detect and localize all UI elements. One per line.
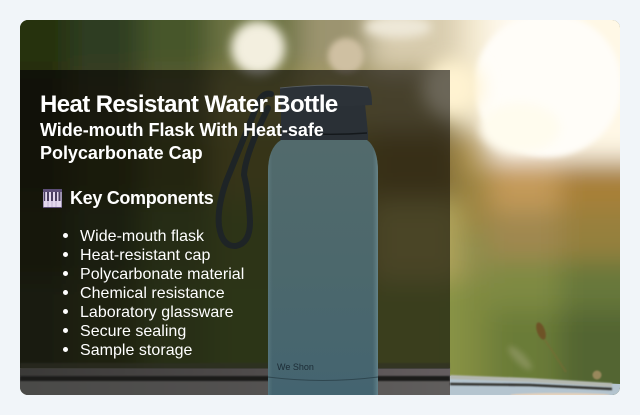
sun glare bbox=[474, 13, 622, 157]
list: key components: Polycarbonate material bbox=[80, 266, 244, 283]
list: key components: Laboratory glassware bbox=[80, 304, 234, 321]
title: Heat Resistant Water Bottle bbox=[40, 91, 338, 118]
icon: piano keys bbox=[43, 189, 62, 208]
list: key components: Heat-resistant cap bbox=[80, 247, 210, 264]
subtitle bbox=[40, 120, 324, 163]
list: key components: Wide-mouth flask bbox=[80, 228, 204, 245]
bottle body bbox=[268, 140, 378, 395]
list: key components: Sample storage bbox=[80, 342, 192, 359]
dark overlay panel bbox=[20, 70, 450, 395]
list: key components: Secure sealing bbox=[80, 323, 186, 340]
bottle cap bbox=[280, 104, 368, 140]
heading: key components: Key Components bbox=[70, 188, 213, 208]
list: key components: Chemical resistance bbox=[80, 285, 225, 302]
wooden rail bbox=[20, 368, 450, 395]
subtitle: Wide-mouth Flask With Heat-safe bbox=[40, 120, 324, 140]
bottle brand: We Shon bbox=[277, 362, 314, 372]
subtitle: Polycarbonate Cap bbox=[40, 143, 203, 163]
list: key components bbox=[63, 228, 244, 359]
bottle base groove bbox=[268, 377, 378, 380]
bottle strap bbox=[219, 94, 271, 246]
grass seed head bbox=[534, 321, 548, 341]
